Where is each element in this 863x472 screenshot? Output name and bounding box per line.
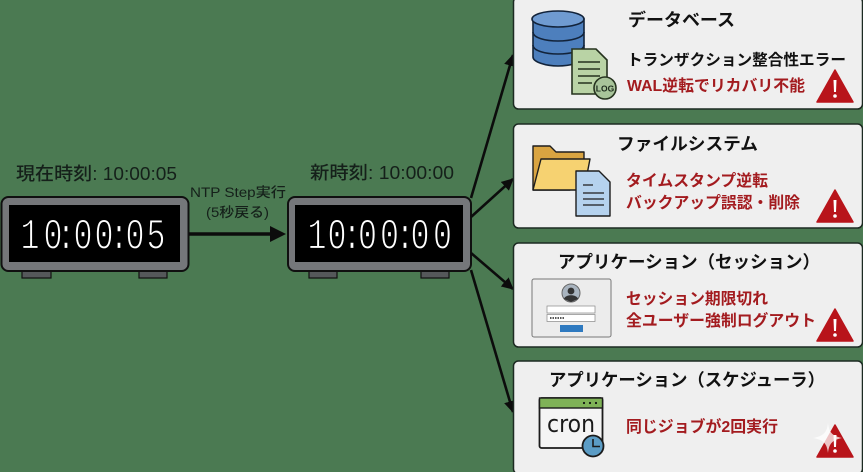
heading: file system: ファイルシステム xyxy=(617,134,758,154)
arrow: to database xyxy=(471,55,513,198)
icon: cron window with clock: cron xyxy=(547,410,595,438)
panel: scheduler application xyxy=(514,361,862,472)
arrow: to session app xyxy=(471,253,513,289)
label: current time: 現在時刻: 10:00:05 xyxy=(16,164,177,184)
clock: new: 10:00:00 xyxy=(308,212,452,262)
text: timestamp: タイムスタンプ逆転 xyxy=(626,172,768,190)
text: job ran twice: 同じジョブが2回実行 xyxy=(626,417,778,436)
icon: warning xyxy=(817,190,853,222)
NTP step caption: NTP Step実行 xyxy=(190,185,286,200)
icon: database with log xyxy=(532,11,616,99)
clock: current: 10:00:05 xyxy=(21,212,166,262)
text: forced logout: 全ユーザー強制ログアウト xyxy=(626,311,816,330)
NTP step caption: (5秒戻る) xyxy=(206,205,269,220)
panel: file system xyxy=(514,124,862,228)
label: new time: 新時刻: 10:00:00 xyxy=(310,163,454,183)
NTP step caption xyxy=(190,185,286,220)
icon: login screen xyxy=(532,279,611,337)
heading: database: データベース xyxy=(628,10,735,30)
clock: current xyxy=(2,197,188,278)
text: session expired: セッション期限切れ xyxy=(626,290,768,308)
arrow: clock to clock xyxy=(189,226,286,242)
text: WAL: WAL逆転でリカバリ不能 xyxy=(627,76,805,95)
text: transaction error: トランザクション整合性エラー xyxy=(627,50,846,69)
arrow: to scheduler app xyxy=(471,270,513,412)
panel: database xyxy=(514,0,862,109)
text: backup: バックアップ誤認・削除 xyxy=(626,194,800,212)
icon: database with log: LOG xyxy=(596,84,615,94)
icon: cron window with clock xyxy=(540,398,604,456)
icon: folder and document xyxy=(533,146,610,216)
icon: warning xyxy=(817,309,853,341)
arrow: to file system xyxy=(471,179,513,217)
panel: session application xyxy=(514,243,862,347)
heading: scheduler application: アプリケーション（スケジューラ） xyxy=(549,370,825,390)
heading: session application: アプリケーション（セッション） xyxy=(558,252,820,272)
icon: warning with sparkle xyxy=(813,423,853,457)
icon: warning xyxy=(817,70,853,102)
clock: new xyxy=(288,197,471,278)
